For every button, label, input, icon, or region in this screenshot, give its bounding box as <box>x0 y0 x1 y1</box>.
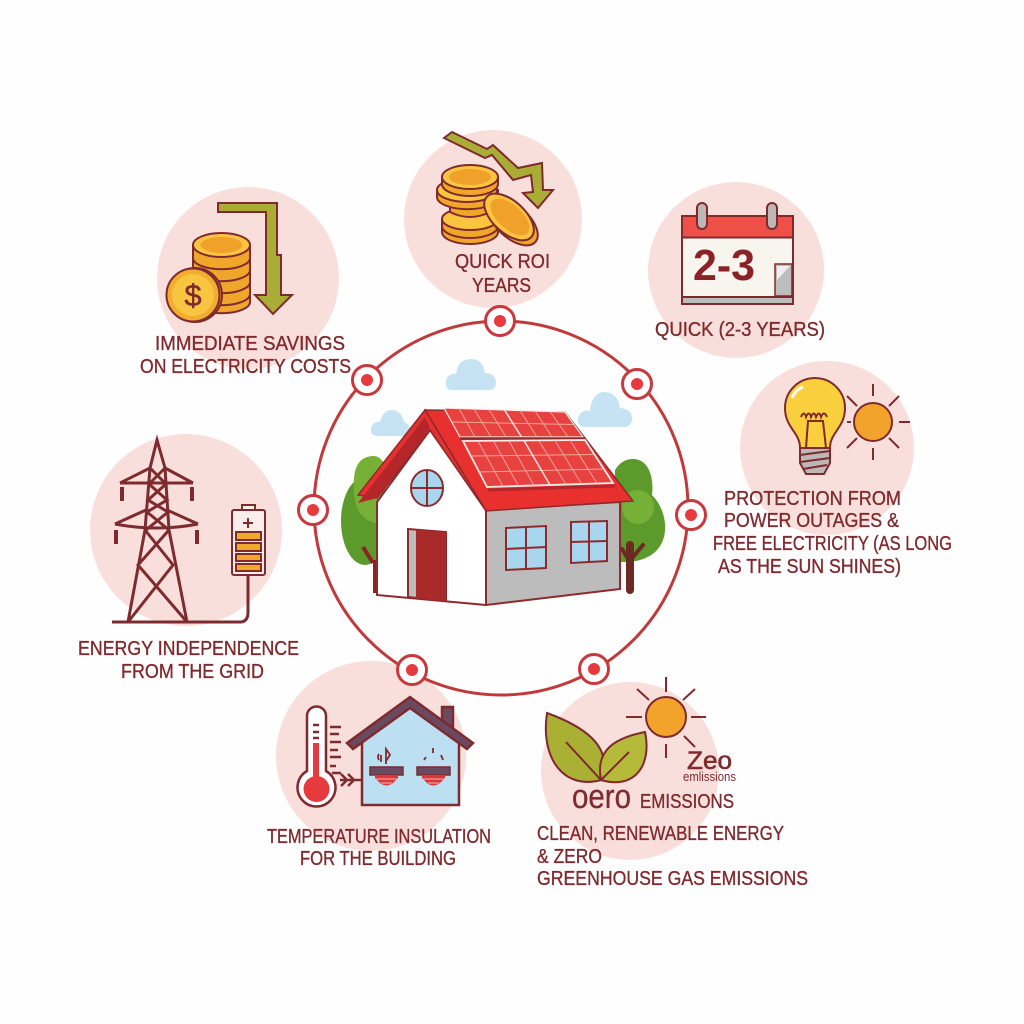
badge: zero emissions <box>683 747 736 784</box>
icon: battery <box>232 505 265 575</box>
central ring with nodes <box>298 306 706 695</box>
label: clean energy: CLEAN, RENEWABLE ENERGY <box>537 823 784 845</box>
label: quick ROI: QUICK ROI <box>455 251 550 273</box>
icon: leaves <box>546 713 647 782</box>
icon: thermometer <box>298 706 362 806</box>
label: temperature insulation <box>267 826 491 870</box>
icon: calendar: 2-3 <box>693 241 755 290</box>
panel: temperature insulation <box>267 661 491 870</box>
heading: zero emissions <box>572 778 734 816</box>
heading: zero emissions: EMISSIONS <box>640 791 734 813</box>
icon: sun <box>847 384 910 460</box>
panel: clean energy <box>537 677 808 890</box>
badge: zero emissions: Zeo <box>687 747 732 775</box>
side wall <box>486 502 620 605</box>
label: protection from outages: POWER OUTAGES & <box>724 510 900 532</box>
icon: light bulb <box>785 378 845 474</box>
icon: calendar <box>682 203 793 304</box>
label: clean energy: GREENHOUSE GAS EMISSIONS <box>537 868 808 890</box>
panel: quick payback <box>648 182 825 358</box>
door <box>408 529 446 601</box>
gable shadow <box>358 417 430 503</box>
round window <box>411 470 443 506</box>
label: temperature insulation: TEMPERATURE INSULATION <box>267 826 491 848</box>
upper solar panel <box>444 408 584 438</box>
icon: falling arrow <box>444 132 553 208</box>
icon: down arrow <box>218 203 292 314</box>
clouds <box>371 359 632 436</box>
label: protection from outages: AS THE SUN SHINES) <box>718 556 901 578</box>
icon: trees <box>341 456 665 593</box>
label: clean energy: & ZERO <box>537 846 602 868</box>
label: protection from outages <box>713 488 952 578</box>
label: immediate savings: IMMEDIATE SAVINGS <box>155 333 345 355</box>
roof <box>425 410 633 511</box>
label: protection from outages: FREE ELECTRICITY (AS LONG <box>713 533 952 555</box>
label: energy independence: FROM THE GRID <box>121 661 264 683</box>
icon: coin stack <box>166 233 250 322</box>
label: energy independence <box>78 638 299 683</box>
label: immediate savings: ON ELECTRICITY COSTS <box>140 356 351 378</box>
panel: protection from outages <box>713 361 952 578</box>
label: temperature insulation: FOR THE BUILDING <box>300 848 456 870</box>
icon: sun <box>626 677 706 758</box>
label: quick ROI: YEARS <box>472 275 531 297</box>
label: protection from outages: PROTECTION FROM <box>724 488 901 510</box>
side windows <box>506 521 607 570</box>
label: quick ROI <box>455 251 550 297</box>
panel: energy independence <box>78 434 299 683</box>
heading: zero emissions: oero <box>572 778 631 816</box>
label: quick payback: QUICK (2-3 YEARS) <box>655 319 825 341</box>
badge: zero emissions: emlissions <box>683 769 736 784</box>
label: immediate savings <box>140 333 351 378</box>
panel: immediate savings: $ <box>184 278 202 313</box>
icon: tilted coin stack <box>437 165 546 254</box>
house with solar panels <box>358 408 633 605</box>
front wall <box>377 430 486 605</box>
panel: quick ROI <box>404 130 582 308</box>
label: energy independence: ENERGY INDEPENDENCE <box>78 638 299 660</box>
panel: immediate savings <box>140 187 351 378</box>
lower solar panel <box>463 440 615 490</box>
icon: transmission tower <box>112 440 248 622</box>
label: clean energy <box>537 823 808 890</box>
gable trim <box>358 410 486 511</box>
icon: insulated house <box>347 697 473 805</box>
